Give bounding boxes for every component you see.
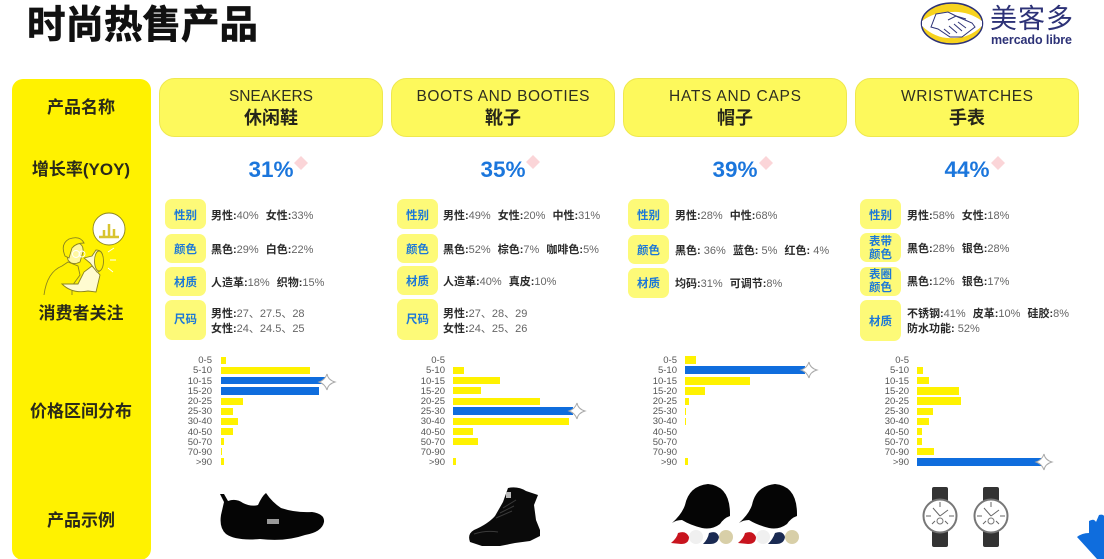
attributes: watches: 颜色 [869, 247, 892, 261]
icon: consumer with megaphone [44, 213, 125, 295]
label: growth rate: 增长率(YOY) [32, 159, 130, 179]
bar chart: hats [653, 355, 817, 468]
header: hats [624, 78, 846, 136]
attributes: watches: 不锈钢:41% 皮革:10% 硅胶:8% [907, 306, 1069, 320]
attributes: boots: 男性:49% 女性:20% 中性:31% [443, 208, 600, 222]
bar chart: sneakers: 20-25 [188, 396, 212, 407]
growth: 35%: 35% [480, 157, 526, 182]
attributes: hats [628, 199, 829, 298]
bar chart: watches: 15-20 [885, 386, 909, 397]
attributes: boots [397, 199, 600, 340]
bar chart: hats: 40-50 [653, 427, 677, 438]
bar chart: sneakers: >90 [196, 457, 212, 468]
attributes: watches [860, 199, 1069, 341]
title: 时尚热售产品 [27, 4, 258, 47]
label: consumer focus: 消费者关注 [38, 303, 124, 323]
bar chart: sneakers: 25-30 [188, 406, 212, 417]
label: price distribution: 价格区间分布 [30, 402, 132, 421]
growth: 44%: 44% [944, 157, 990, 182]
header: hats: 帽子 [717, 108, 753, 128]
attributes: boots: 人造革:40% 真皮:10% [443, 274, 557, 288]
attributes: watches: 表带 [869, 234, 892, 248]
attributes: sneakers: 男性:40% 女性:33% [211, 208, 314, 222]
attributes: hats: 颜色 [637, 243, 660, 257]
bar chart: hats: >90 [661, 457, 677, 468]
attributes: sneakers: 男性:27、27.5、28 [211, 306, 305, 320]
attributes: watches: 性别 [869, 208, 892, 222]
growth: 39%: 39% [712, 157, 758, 182]
header: sneakers: SNEAKERS [229, 88, 313, 105]
attributes: boots: 尺码 [406, 313, 429, 326]
bar chart: hats: 50-70 [653, 437, 677, 448]
header: sneakers: 休闲鞋 [244, 108, 298, 128]
logo: mercado libre [922, 3, 1073, 47]
bar chart: sneakers: 15-20 [188, 386, 212, 397]
bar chart: sneakers: 5-10 [193, 365, 212, 376]
attributes: boots: 性别 [406, 208, 429, 222]
bar chart: watches: 0-5 [895, 355, 909, 366]
product: sneaker [220, 493, 324, 540]
column: sneakers [160, 78, 382, 540]
attributes: hats: 男性:28% 中性:68% [675, 208, 778, 222]
header: watches: 手表 [949, 108, 985, 128]
attributes: watches: 表圈 [869, 267, 892, 281]
attributes: sneakers: 女性:24、24.5、25 [211, 321, 305, 335]
attributes: sneakers: 颜色 [174, 242, 197, 256]
bar chart: boots: 50-70 [421, 437, 445, 448]
product: watches [924, 487, 1008, 547]
bar chart: hats: 0-5 [663, 355, 677, 366]
attributes: watches: 黑色:12% 银色:17% [907, 274, 1010, 288]
bar chart: boots: 25-30 [421, 406, 445, 417]
attributes: hats: 均码:31% 可调节:8% [675, 276, 783, 290]
attributes: watches: 颜色 [869, 280, 892, 294]
bar chart: boots: 10-15 [421, 376, 445, 387]
bar chart: sneakers: 0-5 [198, 355, 212, 366]
attributes: sneakers: 人造革:18% 织物:15% [211, 275, 325, 289]
bar chart: boots: 5-10 [426, 365, 445, 376]
bar chart: sneakers: 70-90 [188, 447, 212, 458]
header: boots [392, 78, 614, 136]
bar chart: watches [885, 355, 1052, 470]
bar chart: watches: 40-50 [885, 427, 909, 438]
header: boots: BOOTS AND BOOTIES [416, 88, 590, 105]
attributes: hats: 性别 [637, 208, 660, 222]
header: watches: WRISTWATCHES [901, 88, 1033, 105]
panel: row labels [12, 79, 151, 559]
bar chart: hats: 25-30 [653, 406, 677, 417]
attributes: boots: 女性:24、25、26 [443, 321, 527, 335]
bar chart: watches: 50-70 [885, 437, 909, 448]
logo: mercado libre: 美客多 [990, 4, 1073, 34]
attributes: watches: 黑色:28% 银色:28% [907, 241, 1010, 255]
attributes: sneakers: 性别 [174, 208, 197, 222]
product: boot [469, 487, 540, 546]
header: watches [856, 78, 1078, 136]
bar chart: boots: 40-50 [421, 427, 445, 438]
bar chart: hats: 15-20 [653, 386, 677, 397]
growth: 31%: 31% [248, 157, 294, 182]
bar chart: watches: 70-90 [885, 447, 909, 458]
header: sneakers [160, 78, 382, 136]
attributes: boots: 男性:27、28、29 [443, 306, 527, 320]
attributes: hats: 材质 [637, 276, 660, 290]
attributes: boots: 黑色:52% 棕色:7% 咖啡色:5% [443, 242, 599, 256]
logo: mercado libre: mercado libre [991, 33, 1072, 47]
label: product examples: 产品示例 [47, 511, 115, 530]
bar chart: boots: 20-25 [421, 396, 445, 407]
column: hats [624, 78, 846, 544]
bar chart: boots: 70-90 [421, 447, 445, 458]
bar chart: sneakers: 30-40 [188, 416, 212, 427]
bar chart: hats: 30-40 [653, 416, 677, 427]
attributes: hats: 黑色: 36% 蓝色: 5% 红色: 4% [675, 243, 829, 257]
bar chart: sneakers: 40-50 [188, 427, 212, 438]
attributes: sneakers: 材质 [174, 275, 197, 289]
header: boots: 靴子 [485, 108, 521, 128]
attributes: boots: 颜色 [406, 242, 429, 256]
attributes: boots: 材质 [406, 274, 429, 288]
product: caps [671, 484, 799, 544]
bar chart: watches: 30-40 [885, 416, 909, 427]
bar chart: hats: 20-25 [653, 396, 677, 407]
attributes: sneakers: 尺码 [174, 313, 197, 326]
bar chart: hats: 70-90 [653, 447, 677, 458]
label: product name: 产品名称 [47, 98, 115, 117]
bar chart: boots [421, 355, 585, 468]
bar chart: watches: >90 [893, 457, 909, 468]
column: watches [856, 78, 1078, 547]
header: hats: HATS AND CAPS [669, 88, 801, 105]
attributes: sneakers [165, 199, 325, 340]
bar chart: boots: 15-20 [421, 386, 445, 397]
bar chart: watches: 10-15 [885, 376, 909, 387]
bar chart: sneakers [188, 355, 335, 468]
bar chart: sneakers: 10-15 [188, 376, 212, 387]
bar chart: watches: 20-25 [885, 396, 909, 407]
bar chart: watches: 25-30 [885, 406, 909, 417]
attributes: watches: 防水功能: 52% [907, 321, 980, 335]
column: boots [392, 78, 614, 546]
bar chart: hats: 10-15 [653, 376, 677, 387]
attributes: sneakers: 黑色:29% 白色:22% [211, 242, 314, 256]
bar chart: hats: 5-10 [658, 365, 677, 376]
bar chart: boots: 30-40 [421, 416, 445, 427]
bar chart: boots: >90 [429, 457, 445, 468]
attributes: watches: 男性:58% 女性:18% [907, 208, 1010, 222]
bar chart: watches: 5-10 [890, 365, 909, 376]
bar chart: boots: 0-5 [431, 355, 445, 366]
bar chart: sneakers: 50-70 [188, 437, 212, 448]
icon: blue hand [1077, 515, 1104, 559]
attributes: watches: 材质 [869, 314, 892, 328]
